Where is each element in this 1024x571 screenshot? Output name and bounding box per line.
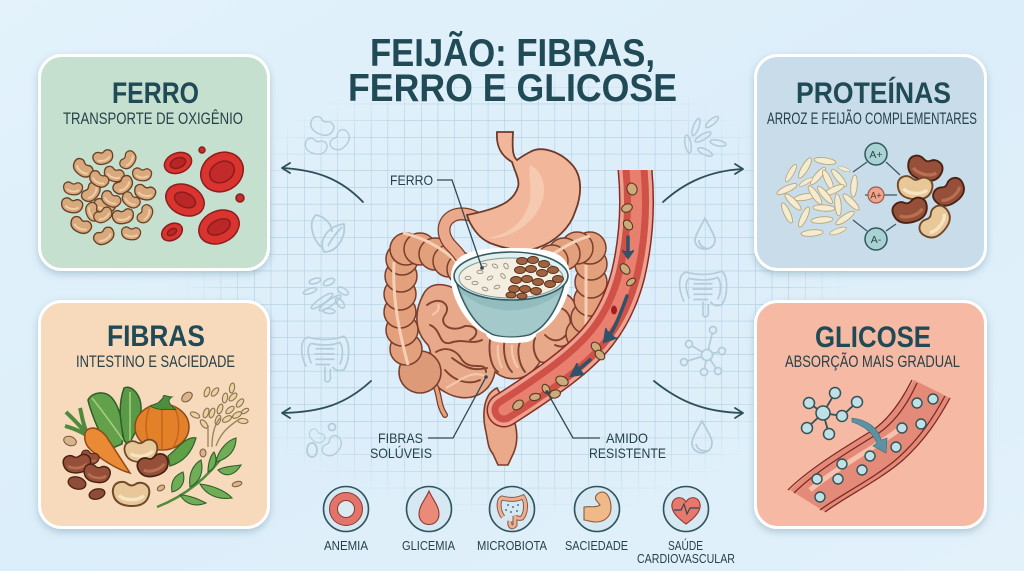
- benefit: glicemia: GLICEMIA: [402, 538, 455, 553]
- benefit: saude cardiovascular: CARDIOVASCULAR: [637, 551, 735, 566]
- bowl: beans: [506, 256, 564, 299]
- benefit: anemia: ANEMIA: [324, 538, 368, 553]
- faint icon: rice: [303, 277, 350, 314]
- arrow: to proteinas: [663, 164, 743, 202]
- title: [348, 31, 677, 110]
- label: fibras soluveis: [370, 375, 488, 461]
- icon: blood vessel with glucose: [788, 380, 950, 512]
- vessel: red cell: [611, 306, 617, 314]
- benefit: glicemia: [402, 486, 455, 553]
- benefit: saude cardiovascular: [637, 486, 735, 566]
- faint icon: molecule: [680, 326, 726, 376]
- background grid: [180, 60, 850, 520]
- title: FEIJÃO: FIBRAS,: [370, 31, 655, 75]
- label: amido resistente: AMIDO: [606, 430, 648, 446]
- icon: glucose molecule: [802, 388, 862, 440]
- panel: fibras: [40, 302, 268, 528]
- panel: glicose: [756, 302, 986, 528]
- faint icon: seeds: [307, 424, 345, 459]
- benefit: saude cardiovascular: SAÚDE: [668, 538, 703, 553]
- faint icons: left column: [302, 115, 353, 459]
- small intestine: [417, 285, 579, 398]
- icon: amino acid links: A-: [871, 234, 882, 246]
- label: ferro: [390, 172, 484, 270]
- title: FERRO E GLICOSE: [348, 67, 677, 110]
- heading: fibras: FIBRAS: [107, 320, 205, 353]
- stomach: [467, 132, 580, 250]
- heading: glicose: GLICOSE: [815, 321, 931, 354]
- arrow: to ferro: [282, 163, 363, 202]
- icon: amino acid links: [853, 143, 900, 250]
- label: amido resistente: [545, 390, 666, 461]
- large intestine: descending colon: [536, 232, 607, 350]
- subtitle: fibras: INTESTINO E SACIEDADE: [76, 353, 235, 371]
- central digestive illustration: [384, 132, 639, 465]
- faint icon: rice: [683, 115, 726, 158]
- subtitle: ferro: TRANSPORTE DE OXIGÊNIO: [63, 109, 243, 128]
- benefit: microbiota: [477, 486, 547, 553]
- arrow: to fibras: [282, 381, 371, 418]
- panel: proteinas: [756, 56, 986, 270]
- blood vessel: [504, 160, 636, 410]
- label: amido resistente: RESISTENTE: [589, 445, 666, 461]
- label: fibras soluveis: SOLÚVEIS: [370, 445, 432, 461]
- bowl of rice and beans: [453, 250, 568, 341]
- faint icon: water drop: [695, 218, 715, 249]
- icon: amino acid links: A+: [870, 190, 882, 200]
- icon: beans group: [891, 154, 969, 243]
- heading: proteinas: PROTEÍNAS: [796, 76, 951, 110]
- label: ferro: FERRO: [390, 172, 433, 188]
- vessel: food particles: [511, 182, 639, 412]
- label: fibras soluveis: FIBRAS: [378, 430, 423, 446]
- panel: ferro: [40, 56, 268, 270]
- icon: vegetables and beans: [62, 383, 249, 507]
- arrow: glucose into vessel: [852, 418, 887, 453]
- icon: red blood cells: [158, 145, 251, 250]
- icon: amino acid links: A+: [869, 149, 883, 161]
- arrow: to glicose: [654, 381, 743, 418]
- rectum: [484, 388, 517, 465]
- faint icon: intestine: [680, 271, 727, 317]
- subtitle: glicose: ABSORÇÃO MAIS GRADUAL: [785, 351, 960, 371]
- faint icon: beans: [303, 115, 353, 156]
- benefit: saciedade: SACIEDADE: [565, 538, 628, 553]
- large intestine: ascending colon: [384, 233, 479, 415]
- bowl: rice: [465, 262, 509, 292]
- icon: rice grains: [776, 156, 861, 237]
- benefit: microbiota: MICROBIOTA: [477, 538, 547, 553]
- faint icons: right column: [680, 115, 727, 453]
- vessel: flow arrows: [571, 237, 633, 376]
- faint icon: leaf and seed: [312, 215, 344, 252]
- bottom benefits row: [324, 486, 735, 566]
- duodenum: [444, 214, 475, 256]
- faint icon: intestine: [302, 336, 349, 382]
- benefit: saciedade: [565, 486, 628, 553]
- stomach highlight: [487, 165, 544, 238]
- faint icon: water drop: [692, 421, 712, 453]
- heading: ferro: FERRO: [112, 77, 199, 110]
- benefit: anemia: [324, 486, 368, 553]
- icon: beans pile: [60, 149, 157, 248]
